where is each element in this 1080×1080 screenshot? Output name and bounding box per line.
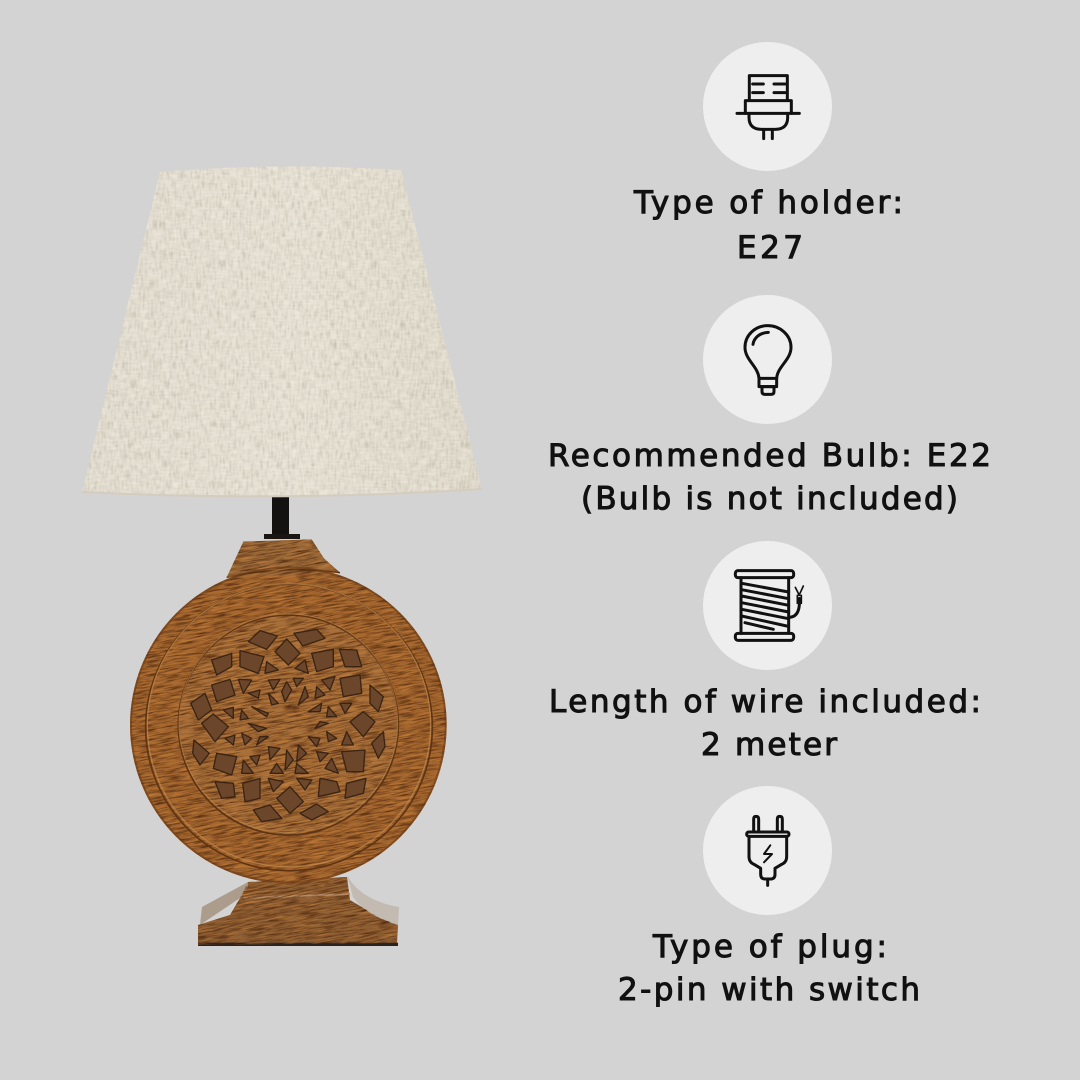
lamp photo xyxy=(82,166,482,946)
text: plug type: 2-pin with switch xyxy=(618,972,920,1008)
icon: lamp holder xyxy=(703,42,832,171)
wood grain texture xyxy=(130,540,447,945)
text: holder type xyxy=(633,185,903,266)
wooden foot xyxy=(198,875,399,946)
text: wire length: Length of wire included: xyxy=(549,684,981,720)
medallion face xyxy=(178,614,399,836)
icon: two pin plug xyxy=(703,786,832,915)
text: bulb type xyxy=(548,438,991,517)
carved medallion pattern xyxy=(191,629,385,822)
text: wire length xyxy=(549,684,981,763)
text: bulb type: Recommended Bulb: E22 xyxy=(548,438,991,474)
text: plug type: Type of plug: xyxy=(652,929,887,965)
spec: recommended bulb xyxy=(548,295,991,517)
wooden neck xyxy=(227,539,340,577)
text: plug type xyxy=(618,929,920,1008)
lamp base and body xyxy=(130,539,447,946)
disc carved rings xyxy=(131,568,446,882)
icon: wire spool xyxy=(703,541,832,670)
text: holder type: Type of holder: xyxy=(633,185,903,221)
wooden disc xyxy=(130,567,447,883)
icon: light bulb xyxy=(703,295,832,424)
spec: type of plug xyxy=(618,786,920,1008)
spec: length of wire xyxy=(549,541,981,763)
lamp rod xyxy=(264,496,300,539)
spec: type of holder xyxy=(633,42,903,266)
text: bulb type: (Bulb is not included) xyxy=(581,481,958,517)
lamp shade xyxy=(80,160,485,502)
text: holder type: E27 xyxy=(737,230,803,266)
text: wire length: 2 meter xyxy=(701,727,837,763)
